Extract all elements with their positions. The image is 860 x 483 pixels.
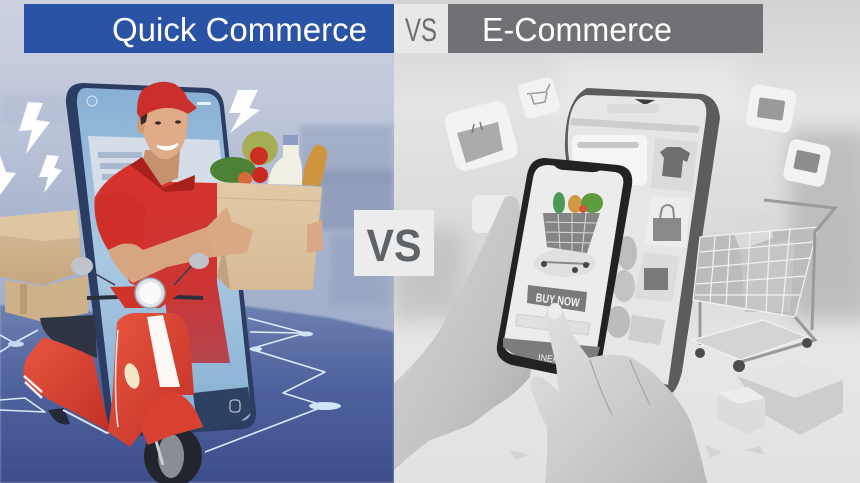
- icon: medical case tile: [745, 83, 797, 134]
- title bar: e-commerce: [448, 4, 763, 53]
- VS center badge: [354, 210, 434, 276]
- phone: back smartphone: [565, 88, 720, 394]
- phone: quick commerce smartphone: [66, 83, 256, 437]
- wheel: [144, 425, 202, 483]
- illustration: shopping cart: [692, 200, 835, 372]
- icon: faint tile: [472, 195, 514, 233]
- title bar: vs: VS: [405, 12, 437, 48]
- rear body: [24, 337, 110, 432]
- sleeve: [95, 190, 146, 250]
- phone: front smartphone: [497, 158, 632, 380]
- illustration: delivery man: [95, 82, 253, 363]
- title bar: quick commerce: [24, 4, 394, 53]
- icon: lightning bolts: [0, 90, 260, 195]
- illustration: paper bag: [217, 182, 322, 290]
- illustration: cardboard boxes: [0, 210, 88, 322]
- cap: [137, 82, 197, 118]
- neck: [142, 150, 180, 186]
- front shield: [108, 313, 194, 447]
- route network lines: [0, 318, 341, 452]
- panel: quick commerce background: [0, 0, 394, 483]
- hand holding phone: [394, 196, 637, 470]
- torso: [95, 163, 230, 363]
- panel: e-commerce background: [394, 0, 860, 483]
- illustration: parcels: [718, 362, 843, 435]
- cart on screen: [534, 192, 603, 277]
- title bar: vs: [394, 4, 448, 53]
- icon: clipboard tile: [442, 99, 520, 173]
- hands on bag: [207, 207, 323, 257]
- icon: shopping cart tile: [517, 76, 561, 120]
- floating icon tiles: [442, 76, 832, 233]
- illustration: red scooter: [24, 253, 209, 483]
- collar: [130, 157, 195, 192]
- VS center badge: VS: [366, 220, 422, 271]
- seat: [40, 315, 97, 358]
- icon: envelope tile: [782, 138, 832, 188]
- buy now button: [527, 285, 587, 312]
- buy now button: BUY NOW: [535, 290, 581, 310]
- fender: [140, 392, 203, 445]
- screen label: INEF: [538, 352, 559, 364]
- arm: [108, 207, 253, 283]
- hand tapping phone: [530, 303, 707, 483]
- mirrors: [85, 262, 195, 285]
- face: [142, 106, 188, 159]
- title bar: quick commerce: Quick Commerce: [112, 12, 367, 49]
- title bar: e-commerce: E-Commerce: [482, 12, 672, 49]
- illustration: groceries: [210, 131, 327, 186]
- handlebars: [87, 296, 203, 298]
